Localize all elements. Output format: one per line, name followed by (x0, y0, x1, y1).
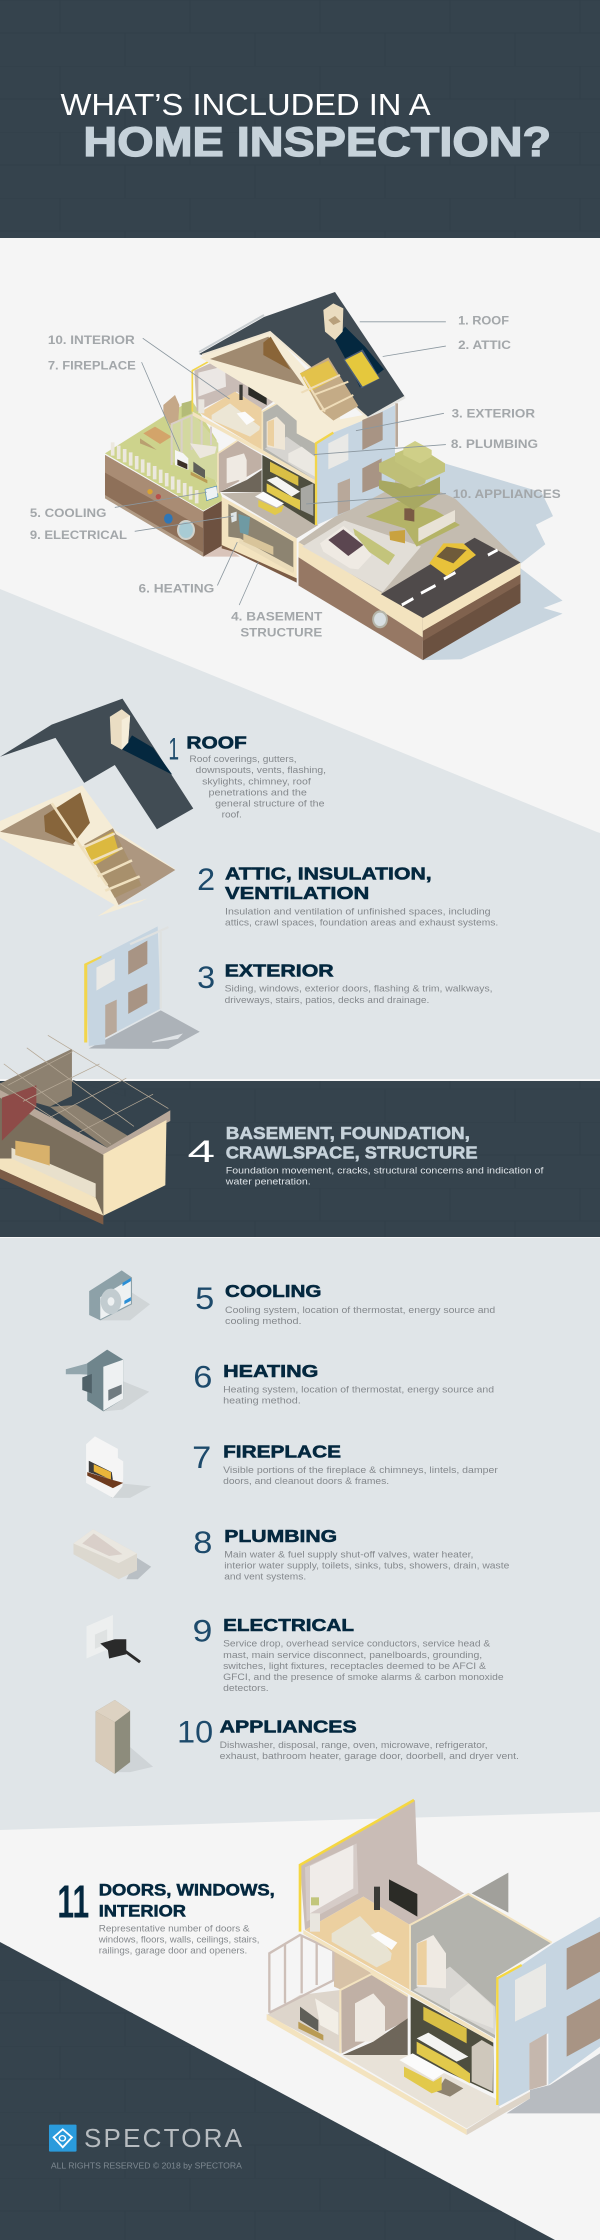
section 1: roof: downspouts, vents, flashing, (196, 765, 326, 775)
section 1: roof: penetrations and the (209, 788, 307, 797)
section 10: appliances: 10 (177, 1714, 213, 1749)
callout labels with leader lines: STRUCTURE (240, 627, 323, 640)
section 8: plumbing: PLUMBING (224, 1526, 337, 1546)
section 9: electrical: ELECTRICAL (223, 1615, 354, 1635)
section 3: exterior: driveways, stairs, patios, decks and drainage. (225, 995, 429, 1005)
kitchen island (399, 2053, 463, 2097)
illustration: house right part (297, 303, 476, 576)
section 2: attic, insulation, ventilation: attics, crawl spaces, foundation areas and exhaust systems. (225, 918, 498, 927)
kitchen (255, 455, 315, 525)
section 6: heating: Heating system, location of thermostat, energy source and (223, 1385, 494, 1394)
roof (199, 292, 405, 418)
callout labels with leader lines: 5. COOLING (30, 507, 107, 520)
panel: light blue-grey diagonal section (0, 589, 600, 1079)
section 8: plumbing: and vent systems. (224, 1572, 306, 1582)
panel: dark brick band for basement (0, 1081, 600, 1237)
section 10: appliances: APPLIANCES (220, 1716, 357, 1736)
lower hall (218, 441, 262, 493)
section 11: doors, windows, interior: Representative number of doors & (99, 1924, 250, 1934)
section 4: basement, foundation, crawlspace, structure: Foundation movement, cracks, structural concerns and indication of (226, 1166, 544, 1175)
section 5: cooling: Cooling system, location of thermostat, energy source and (225, 1305, 495, 1315)
tree (366, 441, 460, 547)
section 1: roof: roof. (222, 810, 242, 819)
section 10: appliances: Dishwasher, disposal, range, oven, microwave, refrigerator, (220, 1740, 488, 1750)
chimney (323, 303, 343, 340)
callout labels with leader lines: 10. INTERIOR (48, 334, 136, 347)
panel: light section lower (0, 1238, 600, 1830)
yard fence, bins and hedge (353, 510, 455, 565)
icon: refrigerator (96, 1700, 153, 1774)
section 1: roof: general structure of the (215, 799, 325, 808)
section 7: fireplace: FIREPLACE (223, 1441, 341, 1461)
cream wall below attic (297, 388, 368, 443)
section 5: cooling (195, 1281, 495, 1326)
yellow taxi (429, 543, 476, 576)
section 6: heating (193, 1360, 494, 1405)
section 8: plumbing: Main water & fuel supply shut-off valves, water heater, (224, 1550, 473, 1559)
title: WHAT’S INCLUDED IN A (60, 88, 432, 122)
section 1: roof: skylights, chimney, roof (202, 777, 311, 786)
section 9: electrical (192, 1614, 504, 1693)
blue wall (497, 1917, 600, 2107)
icon: roof (0, 699, 193, 829)
lower tiled floor (222, 492, 318, 538)
grey back panel (472, 1873, 508, 1913)
section 4: basement, foundation, crawlspace, structure: 4 (188, 1134, 215, 1169)
floor slab edge (193, 412, 315, 484)
section 11: doors, windows, interior: INTERIOR (99, 1902, 186, 1920)
icon: air conditioner (89, 1270, 150, 1320)
section 9: electrical: detectors. (223, 1683, 269, 1693)
section 10: appliances (177, 1714, 519, 1761)
icon: attic (0, 785, 175, 916)
illustration: house ground shadow and lot (299, 460, 563, 660)
section 2: attic, insulation, ventilation: VENTILATION (225, 883, 369, 903)
section 4: basement, foundation, crawlspace, structure: water penetration. (225, 1177, 311, 1187)
section 7: fireplace: 7 (192, 1440, 211, 1475)
gable and attic (200, 330, 340, 437)
section 8: plumbing: 8 (193, 1525, 212, 1560)
illustration: house left part (105, 330, 340, 583)
terrace (267, 1935, 372, 2053)
section 5: cooling: cooling method. (225, 1316, 302, 1326)
section 6: heating: HEATING (223, 1360, 318, 1381)
basement cutaway (222, 497, 297, 583)
section 8: plumbing (193, 1525, 509, 1582)
icon: furnace (66, 1350, 149, 1411)
section 2: attic, insulation, ventilation: ATTIC, INSULATION, (225, 863, 432, 883)
section 9: electrical: Service drop, overhead service conductors, service head & (223, 1639, 491, 1649)
section 4: basement, foundation, crawlspace, structure: CRAWLSPACE, STRUCTURE (226, 1142, 478, 1162)
section 11: doors, windows, interior: 11 (57, 1877, 89, 1928)
blue drop shadow (383, 460, 563, 660)
section 11: doors, windows, interior (57, 1877, 275, 1956)
section 1: roof (168, 732, 326, 819)
title (60, 88, 551, 166)
callout labels with leader lines: 2. ATTIC (458, 340, 511, 352)
section 5: cooling: 5 (195, 1281, 214, 1316)
logo: Spectora: SPECTORA (84, 2123, 243, 2153)
section 1: roof: ROOF (186, 732, 247, 752)
callout labels with leader lines: 8. PLUMBING (451, 438, 538, 451)
callout labels with leader lines: 3. EXTERIOR (452, 408, 536, 421)
panel: dark header band (0, 0, 600, 238)
section 3: exterior: EXTERIOR (225, 960, 334, 980)
section 10: appliances: exhaust, bathroom heater, garage door, doorbell, and dryer vent. (220, 1752, 519, 1761)
section 3: exterior: Siding, windows, exterior doors, flashing & trim, walkways, (225, 984, 493, 994)
icon: fireplace (86, 1436, 151, 1498)
section 3: exterior (197, 960, 493, 1005)
section 4: basement, foundation, crawlspace, structure (188, 1122, 544, 1187)
grey ground shadow (507, 2053, 600, 2113)
section 4: basement, foundation, crawlspace, structure: BASEMENT, FOUNDATION, (226, 1122, 470, 1143)
section 11: doors, windows, interior: railings, garage door and openers. (99, 1946, 247, 1956)
section 7: fireplace (192, 1440, 498, 1486)
section 2: attic, insulation, ventilation (197, 862, 498, 927)
floor slab edges (267, 1930, 530, 2135)
lower hall (340, 1974, 408, 2055)
callout labels with leader lines: 7. FIREPLACE (48, 360, 136, 373)
lower terrace and fireplace (172, 414, 218, 501)
illustration: interior cutaway (267, 1800, 600, 2135)
upper living room (305, 1879, 417, 1990)
upper back wall (300, 1800, 464, 1932)
left garden block (105, 395, 240, 557)
section 11: doors, windows, interior: DOORS, WINDOWS, (99, 1881, 275, 1899)
section 9: electrical: GFCI, and the presence of smoke alarms & carbon monoxide (223, 1672, 504, 1682)
section 11: doors, windows, interior: windows, floors, walls, ceilings, stairs, (98, 1935, 259, 1945)
section 1: roof: 1 (168, 732, 179, 766)
panel: dark footer triangle (0, 1942, 555, 2240)
upper left room (192, 362, 273, 450)
section 9: electrical: 9 (192, 1614, 212, 1648)
icon: basement cutaway (0, 1035, 170, 1225)
kitchen (411, 1997, 493, 2093)
roof window insulation (345, 352, 379, 387)
section 9: electrical: switches, light fixtures, receptacles deemed to be AFCI & (223, 1661, 487, 1671)
title: HOME INSPECTION? (83, 119, 551, 166)
bathroom (262, 403, 330, 480)
icon: exterior wall (84, 926, 200, 1049)
section 6: heating: 6 (193, 1360, 212, 1394)
section 2: attic, insulation, ventilation: Insulation and ventilation of unfinished spaces, including (225, 907, 491, 916)
section 7: fireplace: Visible portions of the fireplace & chimneys, lintels, damper (223, 1465, 498, 1475)
icon: bathtub (73, 1529, 151, 1579)
chimney shadow (335, 327, 384, 387)
callout labels with leader lines: 1. ROOF (458, 315, 509, 328)
callout labels with leader lines: 6. HEATING (139, 583, 214, 596)
copyright: ALL RIGHTS RESERVED © 2018 by SPECTORA (51, 2161, 243, 2170)
section 5: cooling: COOLING (225, 1281, 321, 1301)
section 9: electrical: mast, main service disconnect, panelboards, grounding, (223, 1650, 482, 1660)
lower floor (342, 2055, 500, 2128)
main lot block (299, 473, 520, 660)
callout labels with leader lines: 9. ELECTRICAL (30, 530, 127, 542)
section 3: exterior: 3 (197, 960, 215, 995)
section 1: roof: Roof coverings, gutters, (189, 754, 297, 764)
attic rafters (300, 357, 358, 421)
section 6: heating: heating method. (223, 1396, 301, 1405)
blue exterior wall (316, 403, 397, 525)
section 7: fireplace: doors, and cleanout doors & frames. (223, 1476, 389, 1486)
section 8: plumbing: interior water supply, toilets, sinks, tubs, showers, drain, waste (224, 1561, 509, 1570)
white car (320, 526, 372, 569)
callout labels with leader lines (30, 315, 561, 640)
bathroom (410, 1894, 552, 2038)
icon: plug and outlet (86, 1615, 140, 1662)
callout labels with leader lines: 4. BASEMENT (231, 611, 322, 624)
callout labels with leader lines: 10. APPLIANCES (453, 488, 561, 501)
section 2: attic, insulation, ventilation: 2 (197, 862, 215, 897)
